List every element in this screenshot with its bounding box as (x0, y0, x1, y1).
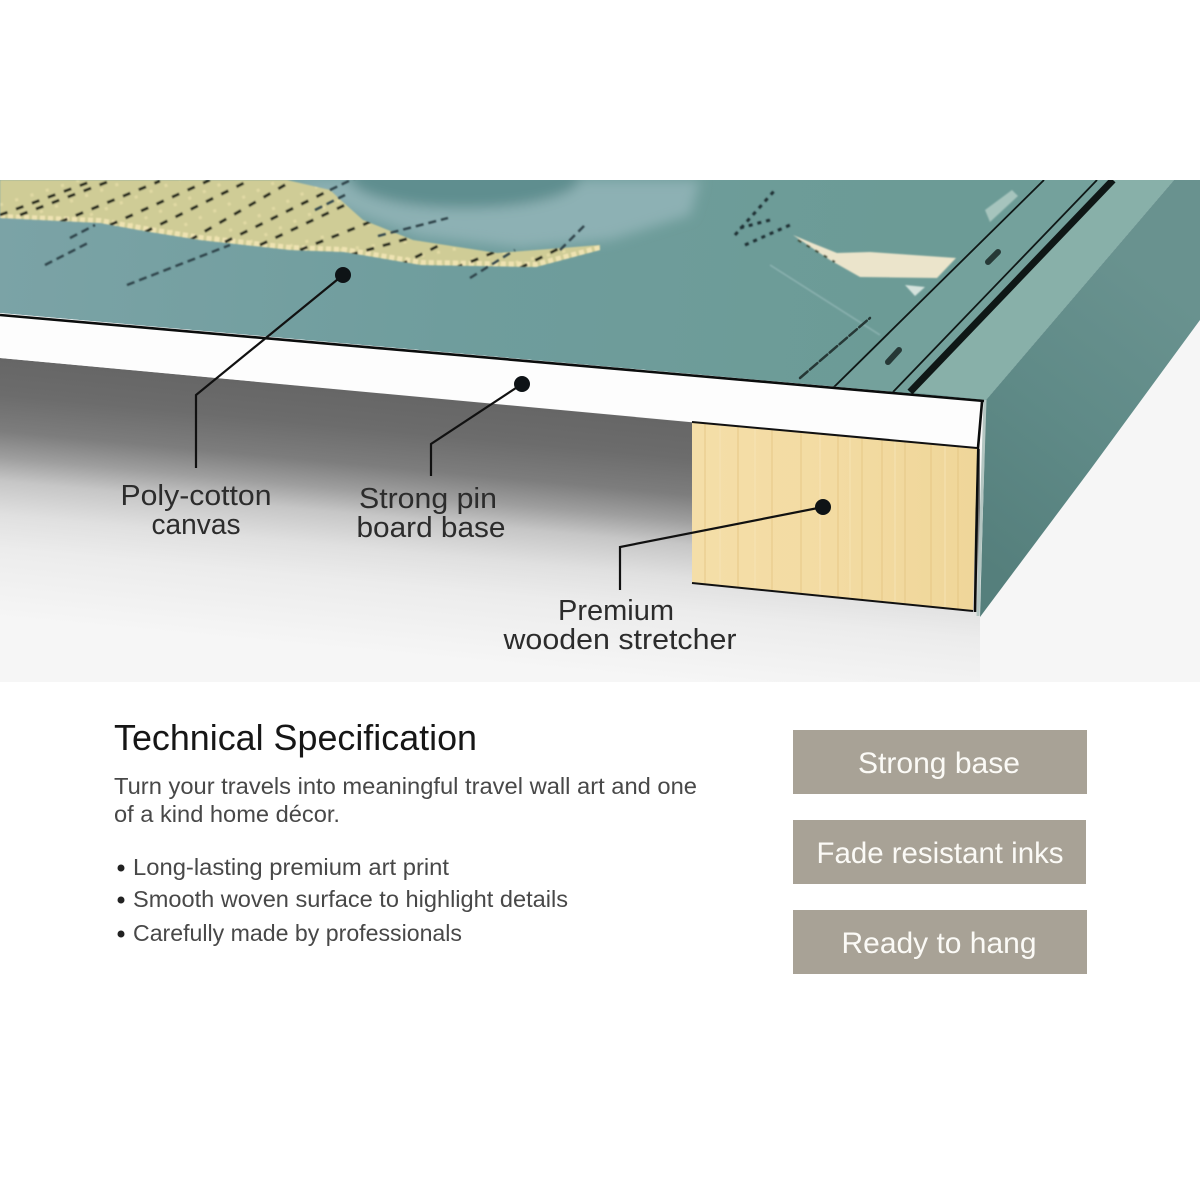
callout: strong pin board base (356, 376, 530, 544)
callout: poly-cotton canvas: canvas (152, 509, 240, 541)
map edge tick labels (800, 252, 998, 378)
badge: fade resistant inks: Fade resistant inks (816, 837, 1064, 870)
intro text: Turn your travels into meaningful travel wall art and one (114, 773, 697, 799)
wooden stretcher (692, 420, 977, 620)
callout: strong pin board base: board base (356, 512, 506, 544)
badge: ready to hang (793, 910, 1087, 974)
badge: ready to hang: Ready to hang (842, 927, 1036, 960)
badge: strong base: Strong base (858, 747, 1020, 780)
callout: premium wooden stretcher: Premium (558, 595, 674, 627)
light margin of the map (836, 386, 962, 398)
infographic (0, 180, 1200, 974)
badge: strong base (793, 730, 1087, 794)
callout: strong pin board base: Strong pin (359, 483, 497, 515)
canvas side face (980, 180, 1200, 617)
strip outline (0, 315, 985, 616)
ocean markings (45, 178, 585, 285)
map border lines (833, 180, 1113, 392)
callout: premium wooden stretcher (502, 499, 831, 656)
intro text: of a kind home décor. (114, 801, 340, 827)
callout: premium wooden stretcher: wooden stretcher (502, 624, 737, 656)
bullet list (118, 854, 568, 946)
land: small island (735, 190, 1018, 335)
heading: technical specification: Technical Specification (114, 717, 477, 758)
callout: poly-cotton canvas: Poly-cotton (120, 480, 272, 512)
bullet list: Smooth woven surface to highlight details (133, 886, 568, 912)
bullet list: Carefully made by professionals (133, 920, 462, 946)
white pin board strip (0, 316, 984, 448)
bullet list: Long-lasting premium art print (133, 854, 450, 880)
shallow shelf and deep basin (297, 180, 701, 250)
canvas map surface (0, 180, 1174, 400)
land: southern coast (0, 180, 600, 268)
callout: poly-cotton canvas (120, 267, 351, 541)
badge: fade resistant inks (793, 820, 1086, 884)
intro text (114, 773, 697, 827)
hero background with shadow (0, 180, 1200, 682)
